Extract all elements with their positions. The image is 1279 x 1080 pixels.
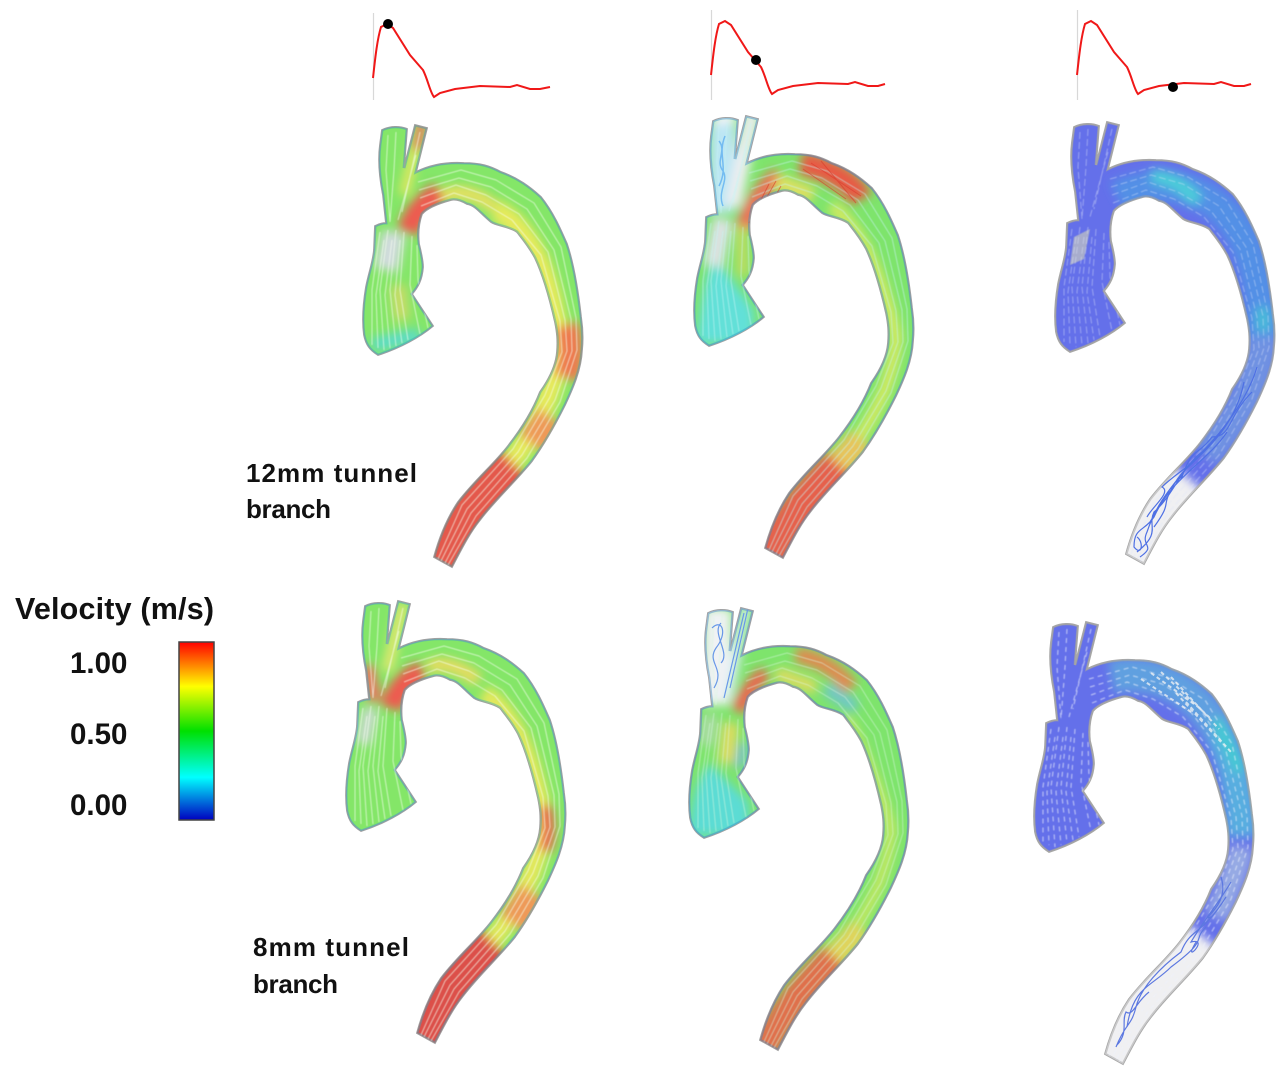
label: 8mm tunnel branch <box>253 932 409 999</box>
time marker <box>1168 82 1178 92</box>
colour bar <box>179 642 214 820</box>
time marker <box>383 19 393 29</box>
aorta: 8mm tunnel, early systole <box>346 601 566 1048</box>
time marker <box>751 55 761 65</box>
axis line <box>372 13 374 100</box>
tick label 0.00: 0.00 <box>70 789 127 822</box>
label: 12mm tunnel branch <box>246 458 417 524</box>
label: 12mm tunnel branch: 12mm tunnel <box>246 458 417 488</box>
tick label 0.50: 0.50 <box>70 718 127 751</box>
panel: pulse curve, late systole <box>711 10 885 100</box>
flow waveform <box>711 21 885 94</box>
aorta: 12mm tunnel, early systole <box>363 118 583 570</box>
tick label 1.00: 1.00 <box>70 647 127 680</box>
aorta: 12mm tunnel, diastole <box>1055 122 1275 572</box>
flow waveform <box>1077 21 1251 94</box>
panel: pulse curve, diastole <box>1077 10 1251 100</box>
axis line <box>1076 10 1078 100</box>
panel: pulse curve, early systole <box>373 13 550 100</box>
aorta: 12mm tunnel, late systole <box>694 111 914 561</box>
flow waveform <box>373 24 550 97</box>
aorta: 8mm tunnel, diastole <box>1034 622 1254 1072</box>
aorta: 8mm tunnel, late systole <box>689 603 909 1053</box>
axis line <box>710 10 712 100</box>
legend: velocity colour scale <box>15 592 214 822</box>
label: 12mm tunnel branch: branch <box>246 494 331 524</box>
label: 8mm tunnel branch: branch <box>253 969 338 999</box>
legend title: Velocity (m/s) <box>15 592 214 626</box>
label: 8mm tunnel branch: 8mm tunnel <box>253 932 409 962</box>
